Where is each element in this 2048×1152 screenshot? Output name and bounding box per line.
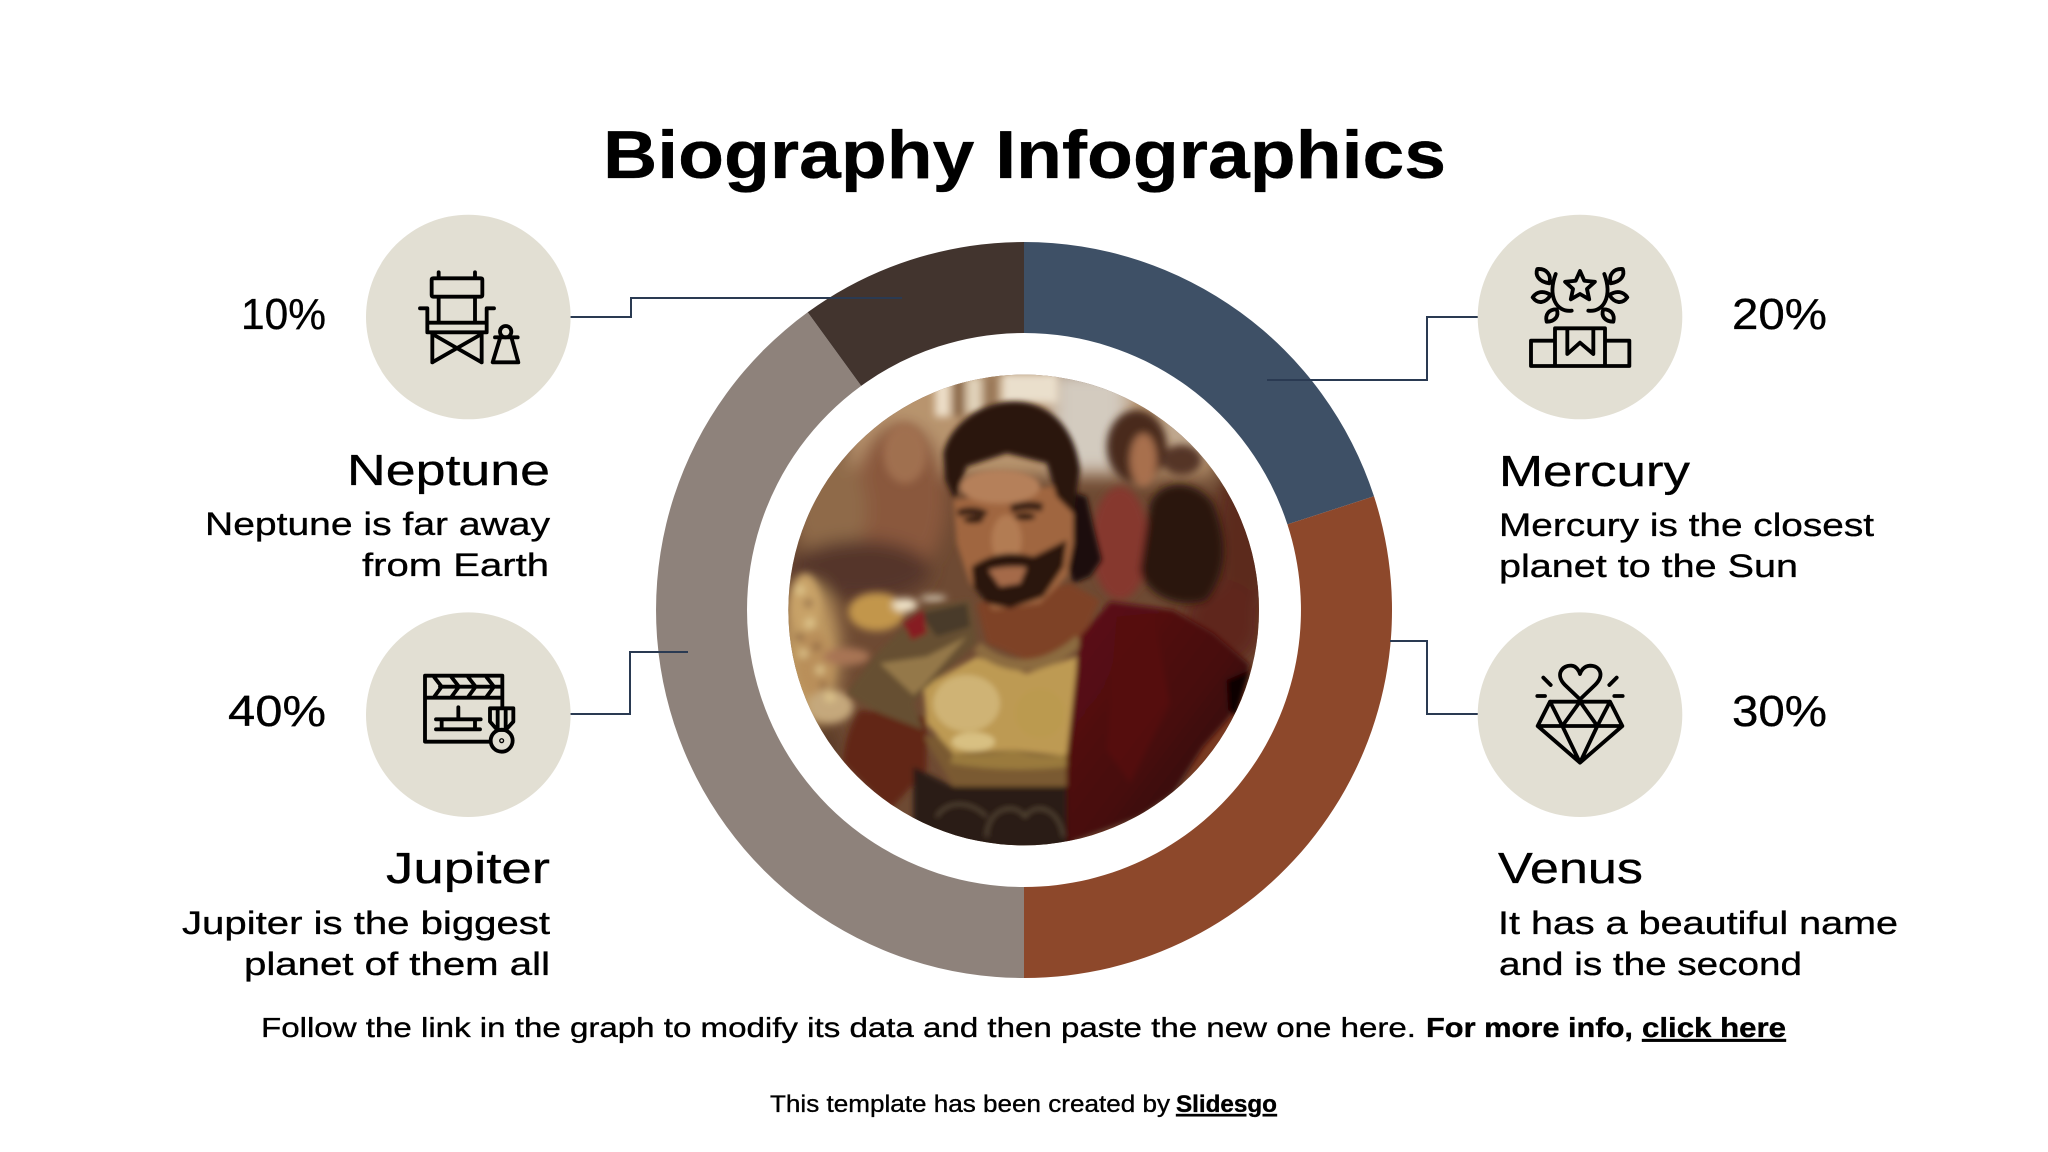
name: Jupiter: Jupiter	[386, 844, 550, 893]
donut chart	[656, 242, 1392, 978]
belt	[913, 767, 1073, 850]
description: Jupiter	[182, 905, 550, 982]
segment: Mercury 20%	[1024, 242, 1374, 524]
footnote: graph link	[261, 1012, 1786, 1043]
icon circle: Neptune	[366, 215, 571, 419]
icon circle: Venus	[1478, 612, 1682, 817]
item: Mercury	[1478, 215, 1874, 584]
waist band	[923, 737, 1073, 790]
chest armour	[923, 657, 1077, 757]
segment: Neptune 10%	[808, 242, 1024, 386]
value: 30%: 30%	[1732, 687, 1827, 736]
description: Venus: It has a beautiful name	[1498, 905, 1898, 941]
icon circle: Jupiter	[366, 612, 571, 817]
connector: Mercury	[1267, 317, 1478, 380]
speckled table	[795, 585, 835, 702]
credit line: This template has been created by	[770, 1091, 1170, 1118]
cloak	[1067, 602, 1250, 843]
eyes and brows	[957, 507, 988, 518]
hair	[943, 402, 1080, 513]
collar	[977, 640, 1080, 665]
name: Venus: Venus	[1498, 844, 1643, 893]
icon: podium and laurel	[1531, 269, 1629, 366]
value: 40%: 40%	[228, 687, 326, 736]
description: Neptune: from Earth	[362, 547, 549, 583]
segment: Venus 30%	[1024, 496, 1392, 978]
portrait photo	[780, 370, 1273, 860]
description: Jupiter: planet of them all	[244, 946, 550, 982]
description: Neptune	[205, 506, 550, 583]
icon: diamond with heart	[1537, 666, 1623, 763]
item: Neptune	[205, 215, 571, 583]
item: Jupiter	[182, 612, 571, 982]
connector: Neptune	[570, 298, 902, 317]
description: Venus: and is the second	[1499, 946, 1802, 982]
title: Biography Infographics	[603, 117, 1446, 193]
neck	[977, 583, 1100, 663]
icon: director chair and weight	[420, 272, 518, 362]
icon circle: Mercury	[1478, 215, 1682, 419]
left arm	[843, 710, 927, 810]
credit line: Slidesgo	[1176, 1091, 1277, 1118]
description: Mercury: planet to the Sun	[1499, 548, 1798, 584]
footnote: graph link: For more info,	[1426, 1012, 1633, 1043]
shoulder armour	[847, 600, 977, 730]
connector: Jupiter	[570, 652, 688, 714]
footnote: graph link: Follow the link in the graph to modify its data and then paste the new one here.	[261, 1012, 1416, 1043]
description: Neptune: Neptune is far away	[205, 506, 550, 542]
beard	[972, 540, 1067, 608]
item: Venus	[1478, 612, 1898, 982]
name: Mercury: Mercury	[1499, 447, 1690, 496]
description: Venus	[1498, 905, 1898, 982]
description: Jupiter: Jupiter is the biggest	[182, 905, 550, 941]
icon: clapperboard and medal	[425, 676, 513, 752]
segment: Jupiter 40%	[656, 312, 1024, 978]
name: Neptune: Neptune	[347, 446, 550, 495]
back hair	[1063, 490, 1102, 583]
value: 20%: 20%	[1732, 290, 1827, 339]
footnote: graph link: click here	[1642, 1012, 1786, 1043]
description: Mercury	[1499, 507, 1874, 584]
description: Mercury: Mercury is the closest	[1499, 507, 1874, 543]
face	[953, 483, 1073, 610]
value: 10%: 10%	[241, 290, 326, 339]
connector: Venus	[1390, 641, 1478, 714]
